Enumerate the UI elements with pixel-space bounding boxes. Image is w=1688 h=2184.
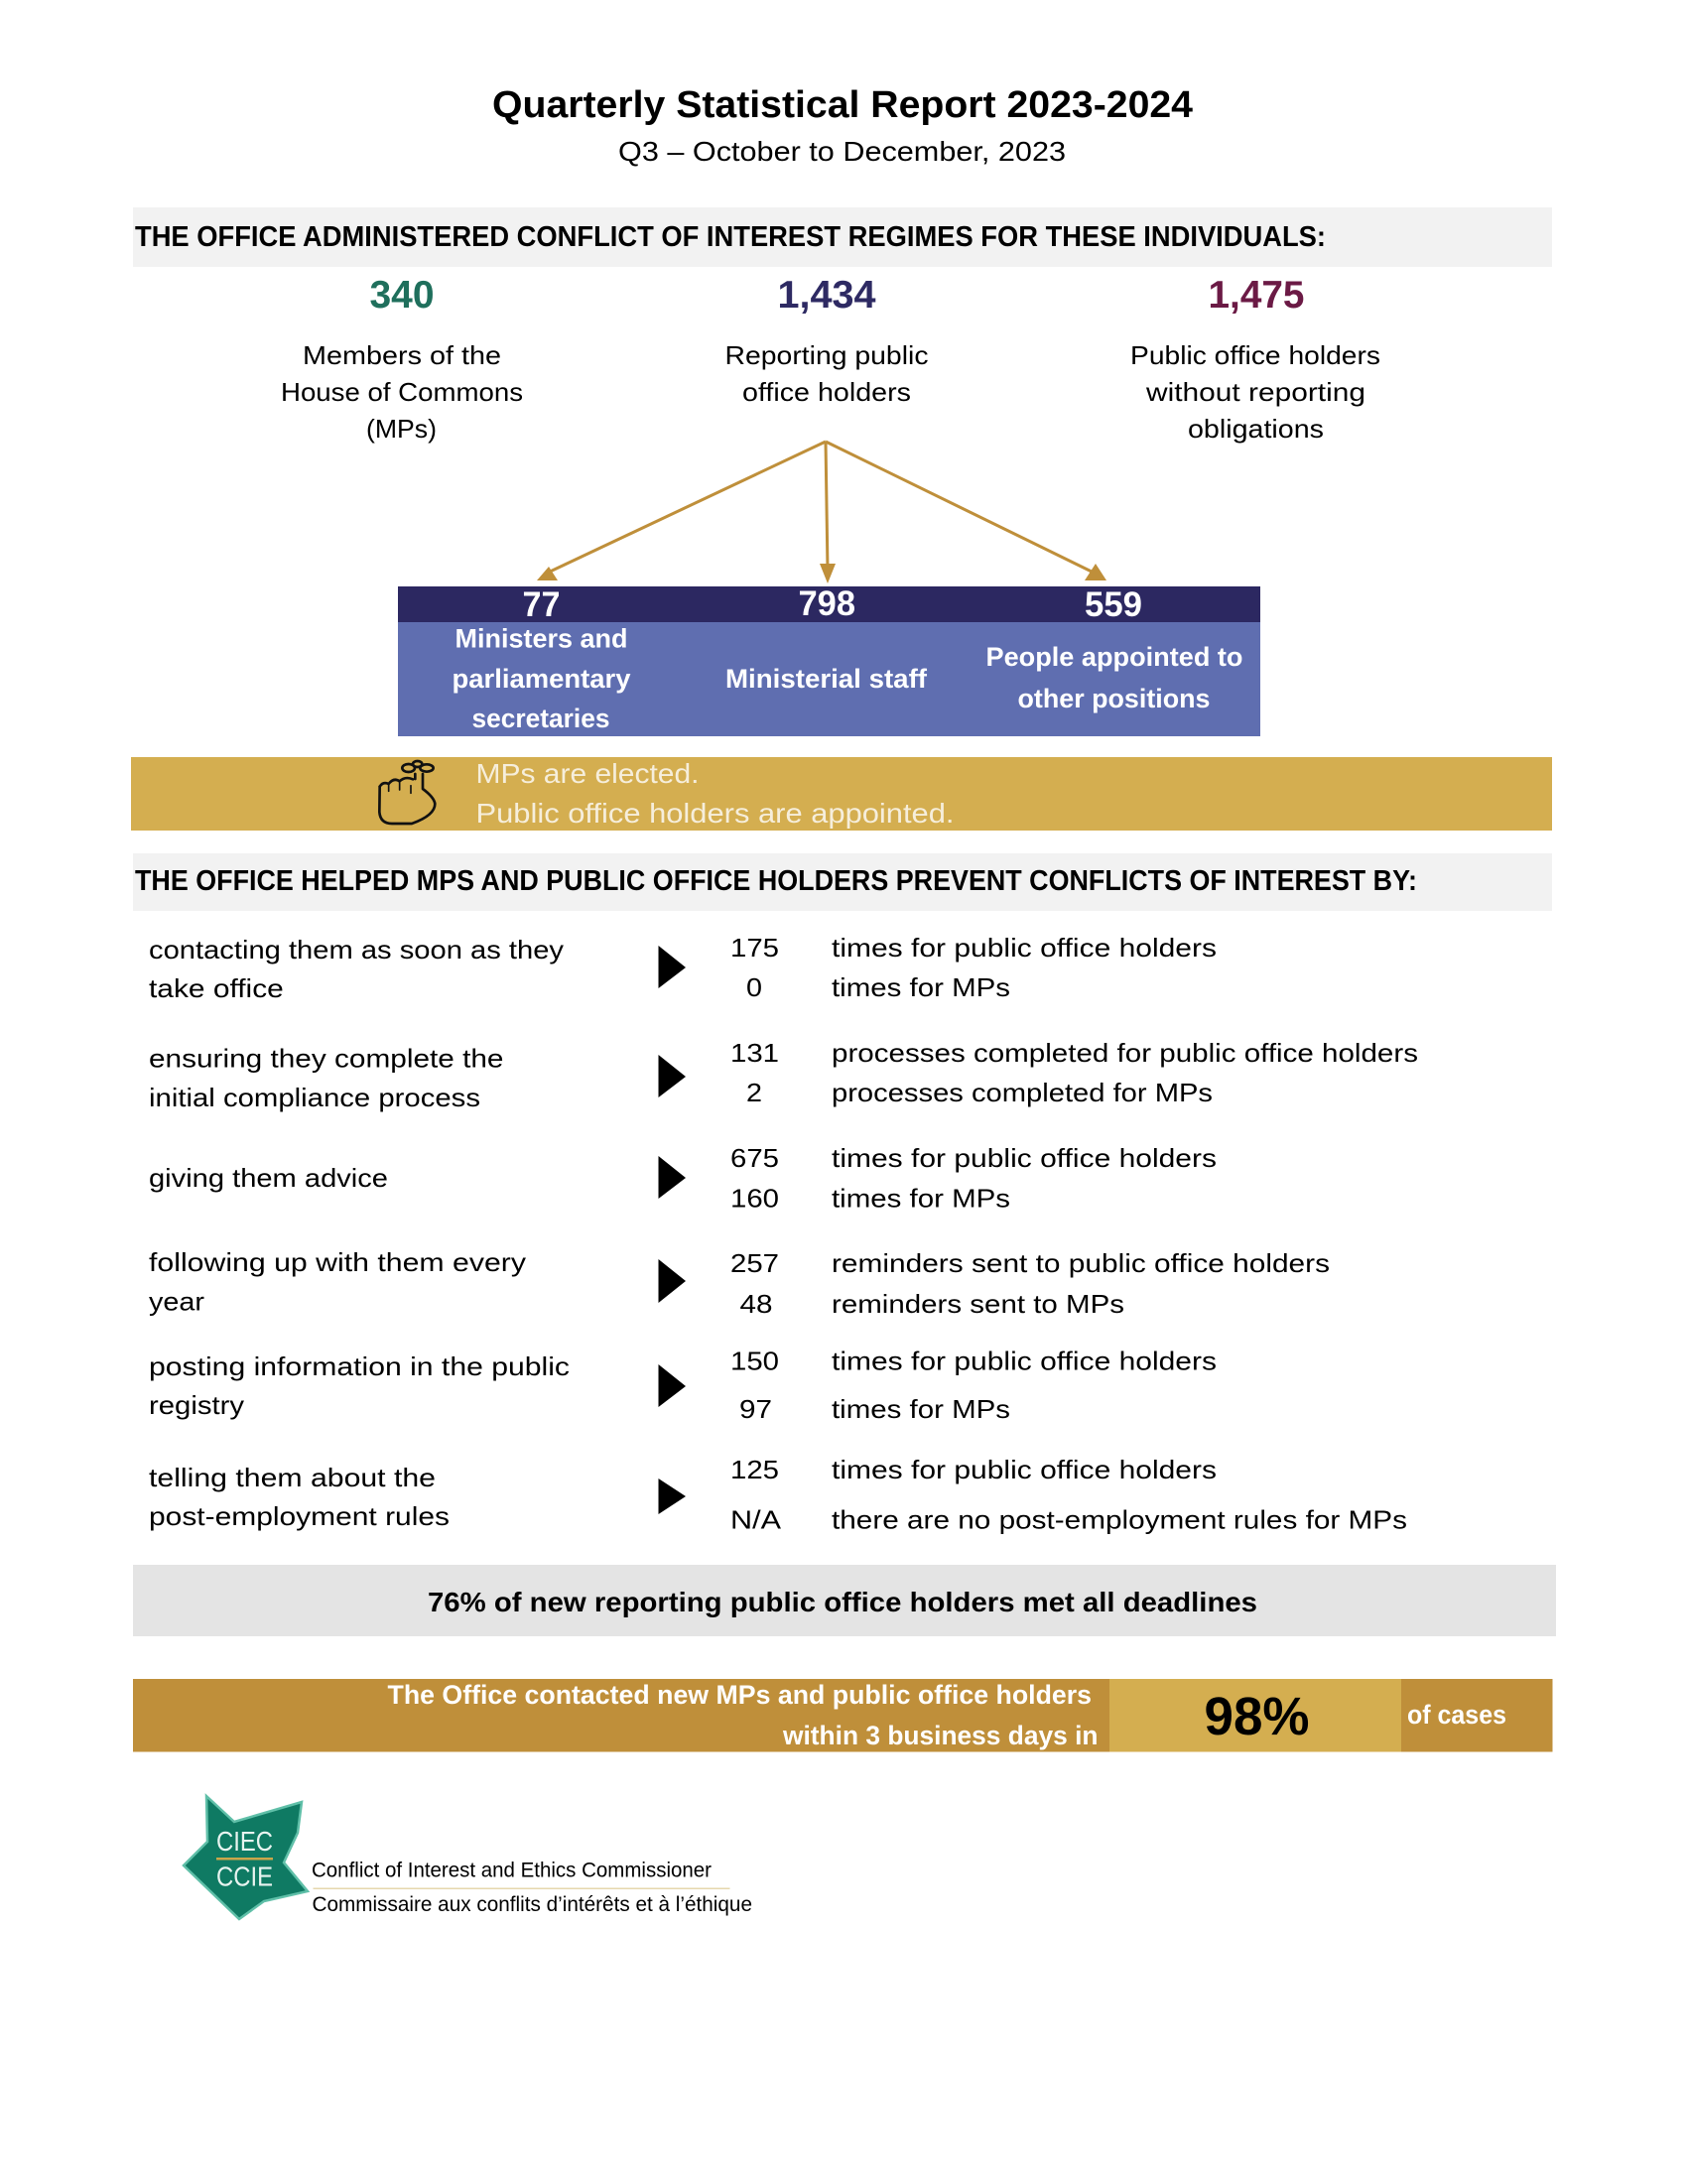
row: contacting them: times for public office holders [832, 933, 1217, 963]
row: contacting them: contacting them as soon as they [149, 935, 564, 964]
logo: CIEC CCIE [184, 1796, 752, 1919]
stat: members of the House of Commons: House of Commons [281, 377, 523, 407]
row: yearly follow-up: reminders sent to public office holders [832, 1248, 1330, 1278]
row: post-employment rules: N/A [730, 1504, 782, 1534]
row: giving advice: times for public office holders [832, 1143, 1217, 1173]
subgroup: people appointed to other positions [986, 585, 1242, 713]
subgroup: ministers and parliamentary secretaries: parliamentary [453, 664, 631, 694]
row: yearly follow-up: following up with them every [149, 1247, 526, 1277]
row: public registry: times for MPs [832, 1394, 1010, 1424]
row: yearly follow-up [149, 1247, 1330, 1319]
row: public registry: registry [149, 1390, 244, 1420]
callout: deadlines met [133, 1565, 1556, 1636]
title: Quarterly Statistical Report 2023-2024 [492, 84, 1193, 126]
stat: public office holders without reporting obligations: obligations [1188, 414, 1324, 444]
logo: CIEC CCIE: CCIE [216, 1862, 273, 1891]
logo: CIEC CCIE: Conflict of Interest and Ethics Commissioner [312, 1858, 712, 1881]
row: initial compliance: ensuring they complete the [149, 1044, 504, 1074]
subgroup: people appointed to other positions: People appointed to [986, 642, 1242, 672]
row: public registry: times for public office holders [832, 1346, 1217, 1375]
subgroup: people appointed to other positions: other positions [1018, 684, 1211, 713]
stat: members of the House of Commons [281, 274, 523, 444]
row: post-employment rules: telling them about the [149, 1463, 436, 1492]
row: post-employment rules: post-employment rules [149, 1501, 450, 1531]
row: initial compliance [149, 1038, 1418, 1112]
panel: individuals heading band [133, 207, 1552, 267]
panel: reminder band: Public office holders are appointed. [476, 798, 955, 829]
subgroup: ministerial staff: 798 [798, 584, 855, 623]
row: contacting them: take office [149, 973, 284, 1003]
subgroup: ministers and parliamentary secretaries [453, 585, 631, 733]
row: giving advice [149, 1143, 1217, 1213]
stat: reporting public office holders: Reporting public [724, 340, 929, 370]
row: post-employment rules: times for public office holders [832, 1455, 1217, 1484]
stat: public office holders without reporting obligations: Public office holders [1130, 340, 1380, 370]
row: post-employment rules: 125 [730, 1455, 779, 1484]
row: public registry: posting information in the public [149, 1351, 570, 1381]
row: yearly follow-up: reminders sent to MPs [832, 1289, 1124, 1319]
subgroup: ministerial staff [725, 584, 928, 694]
row: public registry [149, 1346, 1217, 1424]
row: initial compliance: processes completed for public office holders [832, 1038, 1418, 1068]
callout: contacted within 3 business days: The Office contacted new MPs and public office holders [387, 1680, 1092, 1710]
stat: members of the House of Commons: Members of the [303, 340, 501, 370]
panel: individuals heading band: THE OFFICE ADMINISTERED CONFLICT OF INTEREST REGIMES FOR THESE INDIVIDUALS: [135, 221, 1326, 253]
panel: reminder band: MPs are elected. [476, 758, 699, 789]
stat: public office holders without reporting obligations: 1,475 [1209, 274, 1304, 317]
stat: public office holders without reporting obligations: without reporting [1145, 377, 1365, 407]
row: giving advice: times for MPs [832, 1183, 1010, 1213]
row: initial compliance: processes completed for MPs [832, 1078, 1213, 1107]
row: giving advice: giving them advice [149, 1163, 388, 1193]
row: contacting them: 175 [730, 933, 779, 963]
subtitle: Q3 – October to December, 2023 [618, 136, 1066, 167]
row: public registry: 150 [730, 1346, 779, 1375]
row: initial compliance: initial compliance process [149, 1083, 480, 1112]
subgroup: ministerial staff: Ministerial staff [725, 664, 928, 694]
subgroup: people appointed to other positions: 559 [1085, 585, 1142, 624]
stat: public office holders without reporting obligations [1130, 274, 1380, 444]
row: yearly follow-up: 257 [730, 1248, 779, 1278]
row: contacting them: 0 [746, 972, 762, 1002]
subgroup: ministers and parliamentary secretaries: secretaries [472, 704, 609, 733]
panel: subgroup table [398, 584, 1260, 736]
row: contacting them [149, 933, 1217, 1003]
row: contacting them: times for MPs [832, 972, 1010, 1002]
subgroup: ministers and parliamentary secretaries: 77 [522, 585, 560, 624]
row: giving advice: 160 [730, 1183, 779, 1213]
stat: members of the House of Commons: 340 [369, 274, 435, 317]
callout: deadlines met: 76% of new reporting public office holders met all deadlines [428, 1587, 1257, 1617]
callout: contacted within 3 business days [133, 1679, 1552, 1752]
icon: finger with tied string [379, 761, 435, 824]
logo: CIEC CCIE: CIEC [216, 1826, 273, 1857]
stat: reporting public office holders [724, 274, 929, 407]
row: yearly follow-up: 48 [740, 1289, 772, 1319]
row: public registry: 97 [739, 1394, 772, 1424]
stat: members of the House of Commons: (MPs) [366, 414, 437, 444]
subgroup: ministers and parliamentary secretaries: Ministers and [454, 623, 627, 653]
logo: CIEC CCIE: Commissaire aux conflits d’intérêts et à l’éthique [312, 1892, 752, 1916]
stat: reporting public office holders: 1,434 [778, 274, 876, 317]
panel: prevention heading band [133, 853, 1552, 911]
callout: contacted within 3 business days: of cases [1407, 1700, 1506, 1730]
row: post-employment rules [149, 1455, 1407, 1534]
row: initial compliance: 2 [746, 1078, 762, 1107]
arrows: from reporting public office holders to subgroups [537, 442, 1106, 583]
panel: reminder band [131, 757, 1552, 831]
callout: contacted within 3 business days: 98% [1205, 1687, 1310, 1746]
callout: contacted within 3 business days: within 3 business days in [782, 1721, 1098, 1750]
row: post-employment rules: there are no post-employment rules for MPs [832, 1504, 1407, 1534]
row: initial compliance: 131 [730, 1038, 779, 1068]
stat: reporting public office holders: office holders [742, 377, 911, 407]
row: giving advice: 675 [730, 1143, 779, 1173]
row: yearly follow-up: year [149, 1286, 204, 1316]
panel: prevention heading band: THE OFFICE HELPED MPS AND PUBLIC OFFICE HOLDERS PREVENT CONFLICTS OF INTEREST BY: [135, 865, 1417, 897]
